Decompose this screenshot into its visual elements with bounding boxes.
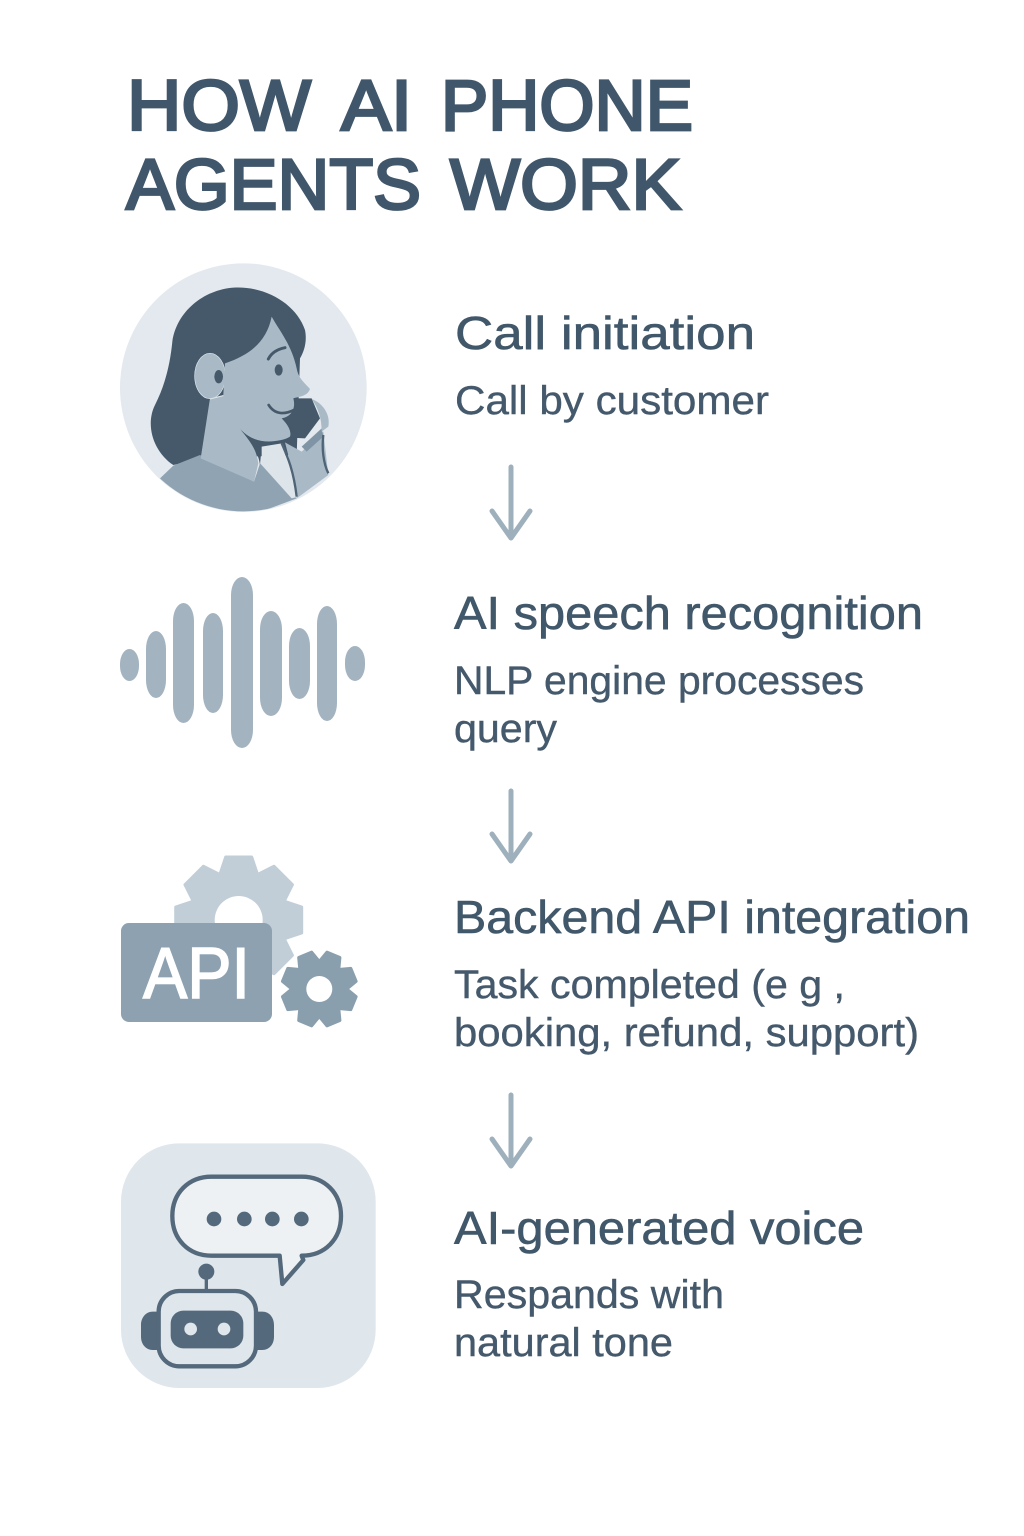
icon: API with gears: API	[143, 934, 250, 1014]
step 3 text: Backend API integration	[454, 891, 970, 943]
step 4 text: natural tone	[454, 1321, 673, 1365]
large gear	[176, 857, 302, 979]
title: PHONE	[441, 67, 693, 146]
title: AGENTS	[126, 146, 421, 225]
step 4 text: Respands with	[454, 1273, 724, 1317]
shoulder	[160, 455, 296, 512]
step 2 text	[454, 587, 923, 751]
hair	[151, 288, 306, 465]
step 4 text	[454, 1202, 864, 1365]
step 1 text: Call by customer	[455, 379, 769, 423]
step 3 text: Task completed (e g ,	[454, 963, 845, 1007]
face and neck	[201, 317, 310, 482]
ear	[195, 353, 225, 399]
icon: sound wave	[120, 577, 365, 748]
speech bubble	[172, 1177, 341, 1284]
step 2 text: query	[454, 707, 557, 751]
arrow 3	[492, 1095, 530, 1166]
collar	[262, 443, 298, 498]
step 3 text: booking, refund, support)	[454, 1011, 919, 1055]
under-jaw shadow	[240, 429, 288, 465]
title: HOW	[127, 67, 311, 146]
arrow 1	[492, 467, 530, 538]
icon: woman on phone	[120, 263, 367, 518]
icon: robot with speech bubble	[121, 1143, 376, 1388]
step 2 text: AI speech recognition	[454, 587, 923, 639]
phone	[297, 398, 320, 438]
title	[126, 67, 693, 225]
hand	[285, 432, 328, 498]
title: AI	[341, 67, 412, 146]
step 1 text	[455, 307, 769, 423]
step 3 text	[454, 891, 970, 1055]
API box	[121, 923, 272, 1022]
step 2 text: NLP engine processes	[454, 659, 864, 703]
arrow 2	[492, 791, 530, 861]
step 1 text: Call initiation	[455, 307, 755, 359]
title: WORK	[450, 146, 681, 225]
robot	[141, 1264, 274, 1366]
step 4 text: AI-generated voice	[454, 1202, 864, 1254]
small gear	[271, 941, 368, 1037]
icon: API with gears	[121, 857, 368, 1037]
